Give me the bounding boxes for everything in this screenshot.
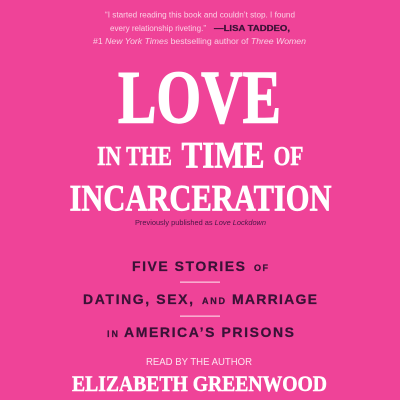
subtitle — [83, 258, 317, 340]
subtitle: DATING, SEX, — [83, 291, 193, 307]
endorsement quote — [93, 10, 306, 46]
previously published note: Previously published as Love Lockdown — [135, 218, 266, 227]
subtitle: AMERICA’S PRISONS — [124, 324, 294, 340]
title: IN THE — [97, 141, 172, 171]
title: LOVE — [118, 56, 281, 140]
title — [70, 56, 332, 220]
subtitle: AND — [202, 296, 226, 306]
endorsement quote: every relationship riveting.” — [110, 24, 206, 33]
subtitle: FIVE STORIES — [132, 258, 245, 274]
endorsement quote: —LISA TADDEO, — [214, 24, 290, 33]
endorsement quote: #1 New York Times bestselling author of Three Women — [93, 37, 306, 46]
subtitle: IN — [107, 329, 118, 339]
title: OF — [274, 141, 304, 171]
subtitle: MARRIAGE — [232, 291, 317, 307]
narrator line: READ BY THE AUTHOR — [146, 356, 252, 368]
subtitle: OF — [254, 263, 268, 273]
endorsement quote: “I started reading this book and couldn’t stop. I found — [105, 10, 295, 20]
author name: ELIZABETH GREENWOOD — [72, 371, 327, 396]
title: TIME — [182, 136, 264, 176]
title: INCARCERATION — [70, 178, 332, 220]
